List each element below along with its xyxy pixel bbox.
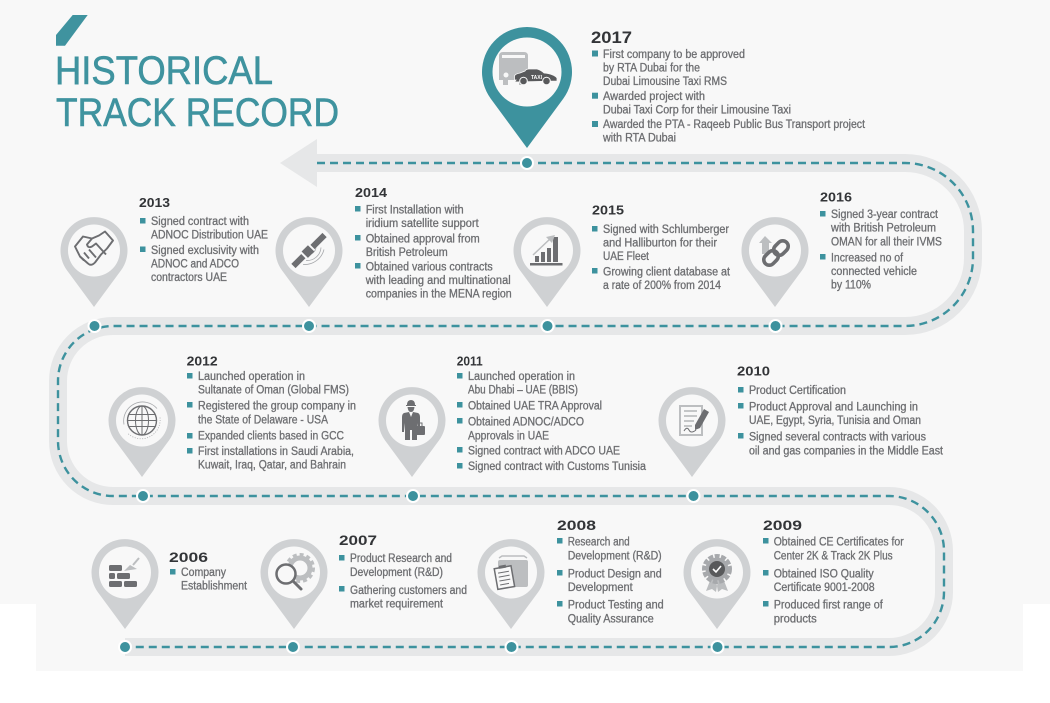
text: 2011 achievements: Obtained ADNOC/ADCO	[468, 417, 584, 429]
text: 2013 achievements: Signed exclusivity with	[151, 245, 259, 257]
icon: growth chart	[530, 235, 562, 266]
text: 2012 achievements	[187, 371, 356, 472]
year 2012: 2012	[187, 355, 218, 369]
text: 2016 achievements: Signed 3-year contract	[831, 209, 939, 221]
text: 2014 achievements: with leading and multinational	[365, 275, 511, 287]
text: 2016 achievements: by 110%	[831, 280, 871, 292]
text: 2011 achievements: Launched operation in	[468, 371, 575, 383]
year 2016: 2016	[820, 191, 852, 205]
text: 2014 achievements: British Petroleum	[366, 247, 448, 259]
text: 2017 achievements: Awarded project with	[603, 91, 705, 103]
text: 2011 achievements: Signed contract with ADCO UAE	[468, 446, 620, 458]
icon: handshake	[75, 232, 113, 265]
text: 2008 achievements	[557, 537, 664, 625]
text: 2006 achievement: Company	[181, 567, 226, 579]
text: 2006 achievement	[170, 567, 248, 593]
text: 2014 achievements	[355, 204, 512, 300]
timeline dots	[88, 157, 782, 653]
milestone 2016	[742, 191, 942, 307]
milestone 2007	[260, 533, 467, 629]
year 2014: 2014	[355, 186, 387, 200]
text: 2008 achievements: Product Testing and	[568, 600, 664, 612]
text: 2013 achievements: ADNOC Distribution UAE	[151, 230, 268, 242]
text: 2014 achievements: companies in the MENA region	[366, 288, 512, 300]
text: 2009 achievements: Certificate 9001-2008	[774, 582, 875, 594]
icon: box and clipboard	[494, 556, 528, 589]
pin: 2017	[482, 27, 572, 148]
text: 2014 achievements: iridium satellite support	[366, 218, 479, 230]
milestone 2015	[514, 204, 731, 307]
pin: 2013	[60, 217, 128, 307]
title	[55, 49, 339, 135]
pin: 2010	[658, 387, 726, 477]
pin: 2015	[514, 217, 580, 307]
year 2007: 2007	[339, 533, 377, 548]
text: 2015 achievements: Signed with Schlumberger	[603, 224, 729, 236]
milestone 2013	[60, 196, 268, 307]
text: 2012 achievements: Sultanate of Oman (Global FMS)	[198, 385, 349, 397]
icon: bricks and trowel	[109, 558, 139, 587]
text: 2008 achievements: Development	[568, 582, 633, 594]
text: 2007 achievements: Product Research and	[350, 553, 452, 565]
text: 2016 achievements: Increased no of	[831, 253, 904, 265]
pin: 2016	[742, 217, 808, 307]
text: 2015 achievements: a rate of 200% from 2014	[603, 280, 722, 292]
milestone 2006	[92, 539, 248, 629]
text: 2008 achievements: Research and	[568, 537, 630, 549]
title: TRACK RECORD	[56, 91, 339, 135]
icon: satellite	[290, 232, 328, 269]
text: 2009 achievements: Center 2K & Track 2K Plus	[774, 550, 893, 562]
icon: engineer with briefcase	[402, 400, 425, 440]
icon: magnifier over gear	[276, 554, 314, 589]
milestone 2012	[108, 355, 356, 477]
text: 2016 achievements: connected vehicle	[831, 266, 917, 278]
text: 2010 achievements: oil and gas companies in the Middle East	[749, 445, 944, 457]
text: 2012 achievements: Expanded clients based in GCC	[198, 431, 344, 443]
text: 2009 achievements: products	[774, 613, 817, 625]
pin: 2008	[478, 539, 544, 629]
icon: bus and taxi	[499, 52, 557, 85]
text: 2012 achievements: Registered the group company in	[198, 401, 356, 413]
text: 2011 achievements: Abu Dhabi – UAE (BBIS)	[468, 385, 578, 397]
year 2013: 2013	[139, 196, 170, 210]
text: 2010 achievements: Signed several contracts with various	[749, 432, 926, 444]
text: 2016 achievements	[820, 209, 942, 292]
text: 2010 achievements: Product Certification	[749, 385, 846, 397]
year 2017: 2017	[591, 28, 632, 47]
title: HISTORICAL	[55, 49, 273, 93]
icon: globe	[124, 402, 160, 439]
text: 2017 achievements: by RTA Dubai for the	[603, 63, 700, 75]
text: 2015 achievements	[592, 224, 731, 292]
year 2008: 2008	[557, 518, 597, 533]
text: 2007 achievements: Gathering customers and	[350, 585, 467, 597]
milestone 2017	[482, 27, 866, 148]
text: 2013 achievements: ADNOC and ADCO	[151, 258, 239, 270]
text: 2011 achievements	[457, 371, 647, 473]
text: 2015 achievements: and Halliburton for their	[603, 238, 717, 250]
text: 2012 achievements: First installations in Saudi Arabia,	[198, 446, 354, 458]
text: 2012 achievements: Kuwait, Iraq, Qatar, and Bahrain	[198, 460, 346, 472]
text: 2010 achievements: Product Approval and Launching in	[749, 401, 918, 413]
icon: bus and taxi: TAXI	[531, 75, 543, 81]
text: 2008 achievements: Quality Assurance	[568, 613, 654, 625]
milestone 2009	[684, 518, 904, 629]
text: 2007 achievements: Development (R&D)	[350, 567, 443, 579]
timeline track with arrow	[58, 139, 973, 647]
milestone 2008	[478, 518, 664, 629]
text: 2012 achievements: the State of Delaware - USA	[198, 414, 328, 426]
text: 2009 achievements: Obtained ISO Quality	[774, 568, 874, 580]
text: 2017 achievements: Dubai Taxi Corp for their Limousine Taxi	[603, 104, 791, 116]
text: 2009 achievements: Obtained CE Certificates for	[774, 537, 904, 549]
year 2010: 2010	[737, 365, 770, 379]
year 2006: 2006	[169, 550, 209, 565]
text: 2015 achievements: UAE Fleet	[603, 251, 650, 263]
pin: 2014	[276, 217, 342, 307]
text: 2014 achievements: Obtained approval from	[366, 234, 480, 246]
text: 2010 achievements: UAE, Egypt, Syria, Tunisia and Oman	[749, 415, 921, 427]
year 2015: 2015	[592, 204, 624, 218]
text: 2009 achievements	[763, 537, 904, 625]
text: 2013 achievements: Signed contract with	[151, 216, 249, 228]
milestone 2011	[378, 355, 647, 477]
text: 2017 achievements: Dubai Limousine Taxi RMS	[603, 76, 727, 88]
pin: 2009	[684, 539, 750, 629]
text: 2006 achievement: Establishment	[181, 581, 248, 593]
text: 2017 achievements: First company to be approved	[603, 49, 745, 61]
text: 2017 achievements: Awarded the PTA - Raqeeb Public Bus Transport project	[603, 119, 866, 131]
year 2009: 2009	[763, 518, 802, 533]
text: 2012 achievements: Launched operation in	[198, 371, 305, 383]
text: 2009 achievements: Produced first range of	[774, 600, 883, 612]
text: 2011 achievements: Signed contract with Customs Tunisia	[468, 461, 647, 473]
text: 2008 achievements: Development (R&D)	[568, 550, 662, 562]
text: 2016 achievements: OMAN for all their IVMS	[831, 236, 942, 248]
text: 2011 achievements: Approvals in UAE	[468, 430, 549, 442]
milestone 2014	[276, 186, 512, 307]
icon: chain link with arrow	[759, 236, 790, 267]
title accent	[56, 15, 88, 46]
text: 2014 achievements: First Installation with	[366, 204, 464, 216]
pin: 2012	[108, 387, 176, 477]
text: 2013 achievements	[140, 216, 268, 284]
text: 2007 achievements	[339, 553, 467, 611]
text: 2016 achievements: with British Petroleum	[830, 223, 936, 235]
text: 2017 achievements: with RTA Dubai	[602, 133, 676, 145]
text: 2015 achievements: Growing client database at	[603, 267, 731, 279]
text: 2007 achievements: market requirement	[350, 599, 444, 611]
text: 2008 achievements: Product Design and	[568, 568, 662, 580]
year 2011: 2011	[457, 355, 483, 369]
pin: 2007	[260, 539, 328, 629]
icon: signed document	[680, 406, 709, 435]
icon: quality badge	[704, 556, 730, 592]
text: 2017 achievements	[592, 49, 866, 145]
text: 2013 achievements: contractors UAE	[151, 272, 227, 284]
text: 2010 achievements	[738, 385, 944, 457]
pin: 2011	[378, 387, 446, 477]
text: 2014 achievements: Obtained various contracts	[366, 262, 493, 274]
text: 2011 achievements: Obtained UAE TRA Approval	[468, 401, 602, 413]
pin: 2006	[92, 539, 158, 629]
milestone 2010	[658, 365, 944, 477]
